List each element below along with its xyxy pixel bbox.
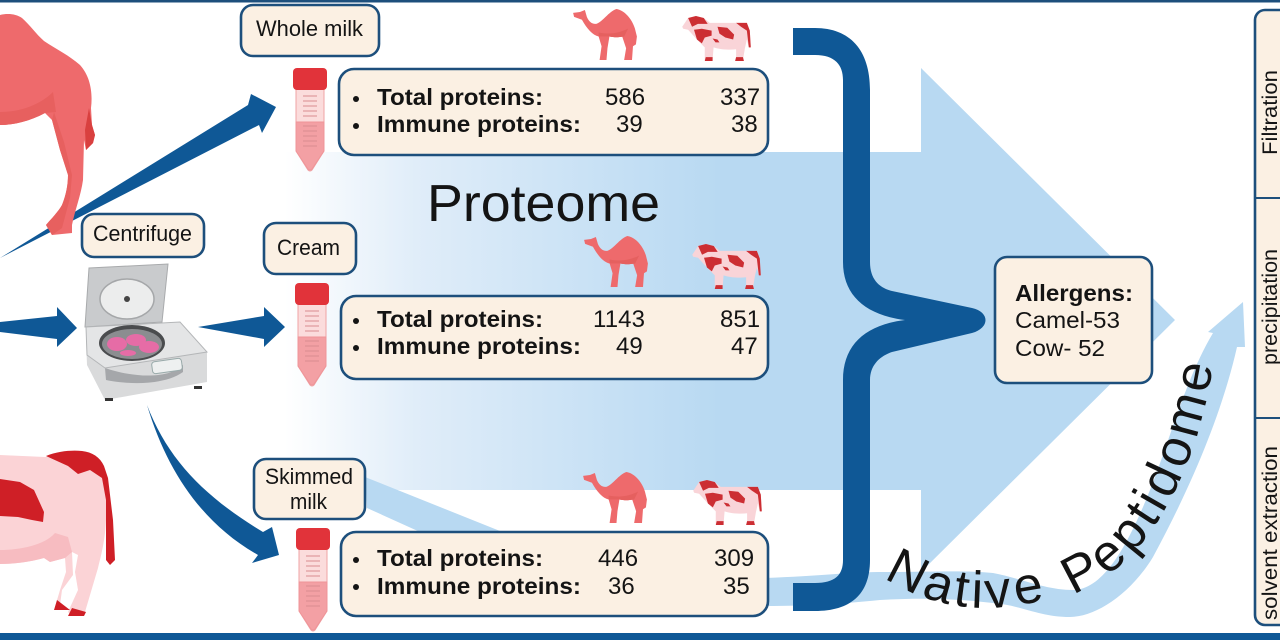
panel: peptide extraction steps	[1255, 10, 1280, 625]
panel: allergens: Camel-53	[1015, 307, 1120, 333]
panel: cream proteins: 1143	[593, 306, 645, 333]
panel: whole milk proteins: Total proteins:	[377, 84, 543, 110]
panel: skimmed milk proteins: 36	[608, 573, 635, 600]
panel: whole milk proteins: 39	[616, 111, 643, 138]
arrow: centrifuge to skimmed milk	[147, 405, 279, 563]
icon: large cow	[0, 451, 115, 616]
bottom border bar	[0, 633, 1280, 640]
panel: cream proteins: 851	[720, 306, 760, 333]
panel: cream proteins: Total proteins:	[377, 306, 543, 332]
panel: whole milk proteins: 38	[731, 111, 758, 138]
icon: camel, skimmed milk	[583, 472, 647, 523]
icon: centrifuge	[85, 264, 207, 401]
icon: large camel	[0, 14, 95, 235]
lid	[85, 264, 168, 327]
heading: Native Peptidome: Native Peptidome	[887, 364, 1212, 608]
arrow: camel to whole milk	[0, 94, 276, 258]
panel: skimmed milk proteins: Total proteins:	[377, 545, 543, 571]
base top	[86, 322, 207, 368]
control panel	[151, 358, 183, 374]
heading: Proteome: Proteome	[427, 175, 660, 233]
panel: skimmed milk proteins: Immune proteins:	[377, 573, 581, 599]
arrow: whole to centrifuge	[0, 307, 77, 347]
panel: skimmed milk proteins: 309	[714, 545, 754, 572]
panel: cream proteins: 49	[616, 333, 643, 360]
panel: skimmed milk proteins: 35	[723, 573, 750, 600]
icon: camel, whole milk	[573, 9, 637, 60]
top border bar	[0, 0, 1280, 2]
label: Whole milk: Whole milk	[256, 16, 364, 41]
label: Cream	[264, 223, 356, 274]
icon: tube whole milk	[293, 68, 327, 171]
label: Cream: Cream	[277, 235, 340, 260]
panel: allergens: Allergens:	[1015, 280, 1133, 306]
icon: cow, whole milk	[682, 16, 751, 61]
label: Skimmed milk	[254, 459, 365, 519]
label: Skimmed milk: Skimmed	[265, 464, 353, 489]
icon: camel, cream	[584, 236, 648, 287]
panel: cream proteins: Immune proteins:	[377, 333, 581, 359]
panel: cream proteins: 47	[731, 333, 758, 360]
arrow: native peptidome curved ribbon	[365, 302, 1245, 617]
panel: skimmed milk proteins: 446	[598, 545, 638, 572]
panel: whole milk proteins	[339, 69, 768, 155]
panel: allergens	[995, 257, 1152, 383]
panel: allergens: Cow- 52	[1015, 335, 1105, 361]
label: Skimmed milk: milk	[290, 489, 328, 514]
brace	[793, 28, 986, 611]
arrow: centrifuge to cream	[198, 307, 285, 347]
panel: skimmed milk proteins	[341, 532, 768, 616]
icon: tube skimmed milk	[296, 528, 330, 631]
panel: whole milk proteins: 586	[605, 84, 645, 111]
panel: whole milk proteins: Immune proteins:	[377, 111, 581, 137]
icon: cow, cream	[692, 244, 761, 289]
panel: whole milk proteins: 337	[720, 84, 760, 111]
label: Centrifuge	[82, 214, 204, 257]
label: Whole milk	[241, 5, 379, 56]
label: Centrifuge: Centrifuge	[93, 221, 192, 246]
base front	[86, 338, 207, 400]
panel: cream proteins	[341, 296, 768, 379]
icon: cow, skimmed milk	[693, 480, 762, 525]
arrow: proteome big gradient arrow	[270, 68, 1175, 572]
icon: tube cream	[295, 283, 329, 386]
